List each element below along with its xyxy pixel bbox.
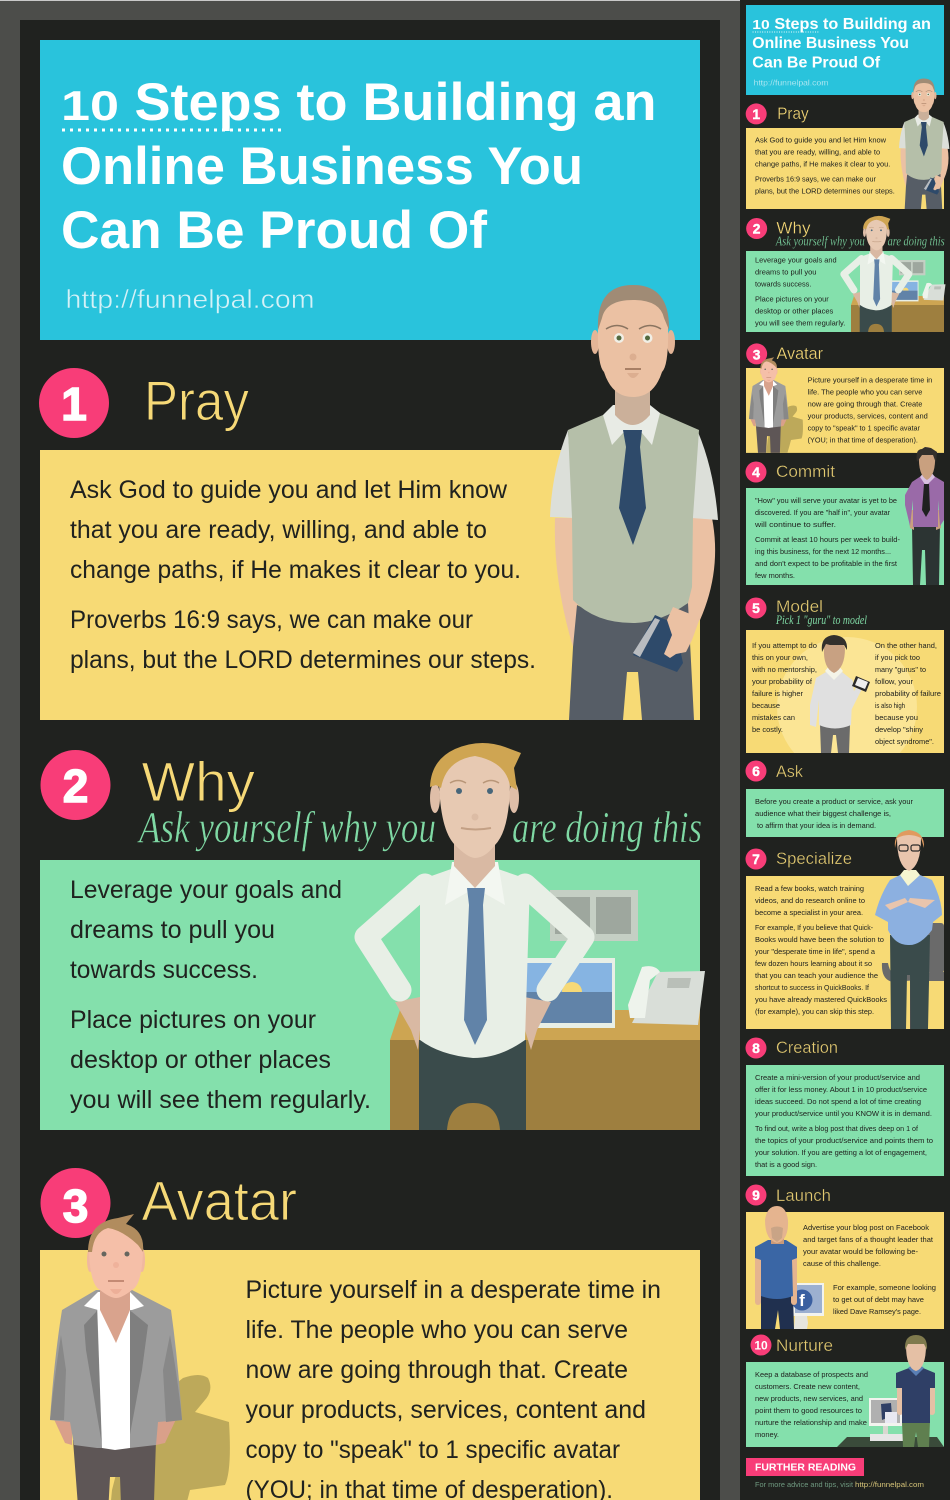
panel: step 1 pray: change paths, if He makes it clear to you.	[70, 556, 521, 584]
figure: man with phone	[810, 635, 870, 753]
thumbnail: title and steps 1 to 3: Steps to Building an	[774, 16, 931, 33]
panel: step 2 why: are doing this	[512, 803, 702, 852]
thumbnail: step 5 model: probability of failure	[875, 689, 941, 698]
figure: man in purple shirt	[905, 447, 944, 585]
icon: facebook monitor	[792, 1283, 824, 1329]
thumbnail: step 4 commit: few months.	[755, 571, 795, 580]
thumbnail: title and steps 1 to 3: (YOU; in that time of desperation).	[808, 435, 918, 444]
thumbnail: step 4 commit: Commit at least 10 hours per week to build-	[755, 535, 900, 544]
thumbnail: step 8 creation: your product/service until you KNOW it is in demand.	[755, 1109, 932, 1118]
thumbnail: step 8 creation: that is a good sign.	[755, 1160, 817, 1169]
panel: main title banner: Online Business You	[61, 137, 583, 196]
figure: man in grey jacket with shadow	[50, 1214, 230, 1500]
further reading footer	[746, 1458, 924, 1489]
thumbnail: step 4 commit: 4	[752, 464, 760, 480]
thumbnail: step 7 specialize: you have already mastered QuickBooks	[755, 995, 887, 1004]
panel: step 2 why	[40, 750, 702, 1130]
thumbnail: step 6 ask: 6	[752, 763, 760, 779]
panel: step 1 pray: Pray	[144, 369, 249, 432]
thumbnail: step 10 nurture: Nurture	[776, 1336, 833, 1355]
thumbnail: step 8 creation: Create a mini-version of your product/service and	[755, 1073, 920, 1082]
panel: step 3 avatar: your products, services, content and	[246, 1396, 646, 1424]
thumbnail: step 9 launch: liked Dave Ramsey's page.	[833, 1307, 921, 1316]
thumbnail: step 7 specialize: 7	[752, 851, 760, 867]
panel: step 2 why: Leverage your goals and	[70, 876, 342, 904]
thumbnail: step 10 nurture: customers. Create new content,	[755, 1382, 860, 1391]
figure: man in vest holding a book	[550, 285, 718, 720]
thumbnail: title and steps 1 to 3: Picture yourself in a desperate time in	[808, 375, 932, 384]
thumbnail: step 6 ask: to affirm that your idea is in demand.	[757, 821, 876, 830]
thumbnail: step 5 model: this on your own,	[752, 653, 808, 662]
icon: facebook monitor: f	[799, 1291, 805, 1310]
thumbnail: title and steps 1 to 3: Can Be Proud Of	[752, 54, 881, 71]
thumbnail: step 9 launch: your avatar would be following be-	[803, 1247, 918, 1256]
icon: computer with book and list	[837, 1398, 944, 1447]
thumbnail: step 5 model: If you attempt to do	[752, 641, 817, 650]
thumbnail: step 8 creation	[746, 1038, 944, 1176]
panel: step 3 avatar: 3	[63, 1180, 88, 1232]
thumbnail: step 7 specialize: (for example), you can skip this step.	[755, 1007, 874, 1016]
thumbnail: step 10 nurture: point them to good resources to	[755, 1406, 862, 1415]
thumbnail: step 9 launch: For example, someone looking	[833, 1283, 936, 1292]
thumbnail: step 6 ask: audience what their biggest challenge is,	[755, 809, 891, 818]
thumbnail: step 6 ask	[746, 760, 944, 837]
panel: step 3 avatar: Avatar	[142, 1169, 297, 1232]
thumbnail: step 7 specialize: become a specialist in your area.	[755, 908, 863, 917]
thumbnail: step 5 model: follow, your	[875, 677, 913, 686]
thumbnail: title and steps 1 to 3: Ask God to guide you and let Him know	[755, 135, 887, 144]
panel: step 3 avatar: Picture yourself in a desperate time in	[246, 1276, 661, 1304]
thumbnail: title and steps 1 to 3: 2	[753, 222, 761, 237]
thumbnail: title and steps 1 to 3: copy to "speak" to 1 specific avatar	[808, 423, 920, 432]
panel: step 1 pray: Proverbs 16:9 says, we can make our	[70, 606, 473, 634]
thumbnail: step 9 launch	[746, 1184, 944, 1329]
thumbnail: step 4 commit	[746, 447, 944, 585]
thumbnail: step 5 model: is also high	[875, 701, 905, 710]
thumbnail: title and steps 1 to 3: your products, services, content and	[808, 411, 928, 420]
thumbnail: title and steps 1 to 3: 1	[752, 107, 760, 122]
thumbnail: step 7 specialize	[746, 830, 944, 1029]
panel: step 2 why: dreams to pull you	[70, 916, 275, 944]
thumbnail: title and steps 1 to 3: Online Business You	[752, 35, 909, 52]
panel: step 3 avatar: copy to "speak" to 1 specific avatar	[246, 1436, 620, 1464]
thumbnail: title and steps 1 to 3: you will see them regularly.	[755, 318, 845, 327]
panel: step 1 pray: that you are ready, willing, and able to	[70, 516, 487, 544]
thumbnail: title and steps 1 to 3: Ask yourself why you	[775, 234, 865, 249]
thumbnail: step 5 model	[746, 598, 944, 753]
thumbnail: step 5 model: Pick 1 "guru" to model	[775, 612, 867, 627]
further reading footer: FURTHER READING	[755, 1462, 856, 1474]
thumbnail: step 10 nurture	[746, 1334, 944, 1447]
thumbnail: step 5 model: failure is higher	[752, 689, 804, 698]
panel: step 2 why: Why	[142, 750, 255, 813]
thumbnail: step 7 specialize: videos, and do research online to	[755, 896, 865, 905]
thumbnail: title and steps 1 to 3: dreams to pull you	[755, 267, 817, 276]
thumbnail: title and steps 1 to 3	[746, 5, 949, 453]
thumbnail: step 5 model: with no mentorship,	[751, 665, 817, 674]
thumbnail: step 9 launch: Launch	[776, 1186, 831, 1205]
panel: step 1 pray: Ask God to guide you and let Him know	[70, 476, 508, 504]
thumbnail: step 10 nurture: money.	[755, 1430, 779, 1439]
thumbnail: step 5 model: Model	[776, 597, 823, 616]
thumbnail: title and steps 1 to 3: Leverage your goals and	[755, 255, 837, 264]
thumbnail: step 5 model: because you	[875, 713, 918, 722]
thumbnail: step 7 specialize: For example, If you believe that Quick-	[755, 923, 873, 932]
panel: step 3 avatar: now are going through that. Create	[246, 1356, 628, 1384]
panel: main title banner	[40, 40, 700, 340]
panel: step 2 why: 2	[63, 760, 88, 812]
panel: step 3 avatar: life. The people who you can serve	[246, 1316, 628, 1344]
thumbnail: step 4 commit: "How" you will serve your avatar is yet to be	[755, 496, 897, 505]
figure: bald man in blue shirt	[755, 1206, 797, 1329]
thumbnail: step 10 nurture: Keep a database of prospects and	[755, 1370, 868, 1379]
panel: step 2 why: towards success.	[70, 956, 258, 984]
thumbnail: title and steps 1 to 3: Pray	[777, 104, 809, 123]
thumbnail: step 7 specialize: that you can teach your audience the	[755, 971, 878, 980]
thumbnail: step 9 launch: 9	[752, 1187, 760, 1203]
thumbnail: step 5 model: develop "shiny	[875, 725, 923, 734]
thumbnail: step 9 launch: cause of this challenge.	[803, 1259, 881, 1268]
thumbnail: title and steps 1 to 3: desktop or other places	[755, 306, 834, 315]
thumbnail: step 5 model: because	[752, 701, 780, 710]
thumbnail: step 7 specialize: Specialize	[776, 849, 852, 868]
thumbnail: step 6 ask: Before you create a product or service, ask your	[755, 797, 913, 806]
figure: man with glasses and crossed arms by chair	[875, 830, 944, 1029]
thumbnail: step 9 launch: to get out of debt may have	[833, 1295, 924, 1304]
thumbnail: step 5 model: On the other hand,	[875, 641, 937, 650]
thumbnail: step 10 nurture: 10	[754, 1338, 768, 1352]
thumbnail: step 5 model: 5	[752, 600, 760, 616]
thumbnail: step 4 commit: discovered. If you are "half in", your avatar	[755, 508, 890, 517]
thumbnail: step 4 commit: will continue to suffer.	[754, 520, 836, 529]
thumbnail: step 5 model: many "gurus" to	[875, 665, 926, 674]
panel: step 2 why: you will see them regularly.	[70, 1086, 371, 1114]
panel: step 3 avatar	[40, 1168, 700, 1500]
thumbnail: step 7 specialize: shortcut to success in QuickBooks. If	[755, 983, 870, 992]
thumbnail: step 7 specialize: Read a few books, watch training	[755, 884, 864, 893]
thumbnail: title and steps 1 to 3: life. The people who you can serve	[808, 387, 922, 396]
thumbnail: title and steps 1 to 3: towards success.	[755, 279, 811, 288]
thumbnail: step 9 launch: and target fans of a thought leader that	[803, 1235, 934, 1244]
panel: main title banner: Can Be Proud Of	[61, 201, 487, 260]
panel: main title banner: 10	[61, 82, 119, 129]
thumbnail: step 6 ask: Ask	[776, 762, 804, 781]
panel: main title banner: http://funnelpal.com	[66, 284, 314, 314]
thumbnail: step 4 commit: Commit	[776, 462, 835, 481]
thumbnail: title and steps 1 to 3: change paths, if He makes it clear to you.	[755, 159, 890, 168]
thumbnail: step 8 creation: ideas succeed. Do not spend a lot of time creating	[755, 1097, 921, 1106]
thumbnail: step 9 launch: Advertise your blog post on Facebook	[803, 1223, 929, 1232]
thumbnail: step 4 commit: and don't expect to be profitable in the first	[755, 559, 898, 568]
thumbnail: step 8 creation: Creation	[776, 1038, 838, 1057]
panel: main title banner: Steps to Building an	[134, 73, 656, 132]
thumbnail: title and steps 1 to 3: 10	[752, 18, 770, 32]
thumbnail: step 7 specialize: few dozen hours learning about it so	[755, 959, 872, 968]
thumbnail: title and steps 1 to 3: 3	[753, 348, 761, 363]
panel: step 1 pray: 1	[61, 378, 87, 430]
thumbnail: step 5 model: object syndrome".	[875, 737, 934, 746]
thumbnail: step 10 nurture: new products, new services, and	[755, 1394, 863, 1403]
panel: step 2 why: Ask yourself why you	[137, 803, 436, 852]
thumbnail: step 5 model: be costly.	[752, 725, 783, 734]
thumbnail: step 8 creation: the topics of your product/service and points them to	[755, 1136, 933, 1145]
thumbnail: title and steps 1 to 3: http://funnelpal.com	[754, 78, 828, 87]
panel: step 2 why: desktop or other places	[70, 1046, 331, 1074]
panel: step 1 pray: plans, but the LORD determines our steps.	[70, 646, 536, 674]
thumbnail: step 4 commit: ing this business, for the next 12 months...	[755, 547, 891, 556]
thumbnail: title and steps 1 to 3: Avatar	[776, 344, 823, 363]
thumbnail: step 8 creation: offer it for less money. About 1 in 10 product/service	[755, 1085, 927, 1094]
thumbnail: step 8 creation: To find out, write a blog post that dives deep on 1 of	[755, 1124, 919, 1133]
thumbnail: step 7 specialize: your "desperate time in life", spend a	[755, 947, 876, 956]
thumbnail: title and steps 1 to 3: that you are ready, willing, and able to	[755, 147, 880, 156]
thumbnail: step 5 model: your probability of	[752, 677, 813, 686]
thumbnail: step 8 creation: your solution. If you are getting a lot of engagement,	[755, 1148, 927, 1157]
thumbnail: step 8 creation: 8	[752, 1040, 760, 1056]
panel: step 1 pray	[39, 368, 700, 720]
figure: man at desk with hands on hips	[366, 743, 705, 1130]
thumbnail: title and steps 1 to 3: Proverbs 16:9 says, we can make our	[755, 174, 876, 183]
thumbnail: step 5 model: mistakes can	[752, 713, 795, 722]
further reading footer: For more advice and tips, visit	[755, 1480, 854, 1489]
thumbnail: title and steps 1 to 3: Place pictures on your	[755, 294, 829, 303]
thumbnail: title and steps 1 to 3: plans, but the LORD determines our steps.	[755, 186, 895, 195]
figure: man in navy shirt	[896, 1335, 935, 1447]
thumbnail: step 5 model: if you pick too	[875, 653, 920, 662]
thumbnail: title and steps 1 to 3: Why	[776, 218, 811, 237]
further reading footer: http://funnelpal.com	[855, 1480, 924, 1489]
thumbnail: step 7 specialize: Books would have been the solution to	[755, 935, 884, 944]
thumbnail: step 10 nurture: nurture the relationship and make	[755, 1418, 867, 1427]
panel: step 2 why: Place pictures on your	[70, 1006, 316, 1034]
thumbnail: title and steps 1 to 3: now are going through that. Create	[808, 399, 922, 408]
